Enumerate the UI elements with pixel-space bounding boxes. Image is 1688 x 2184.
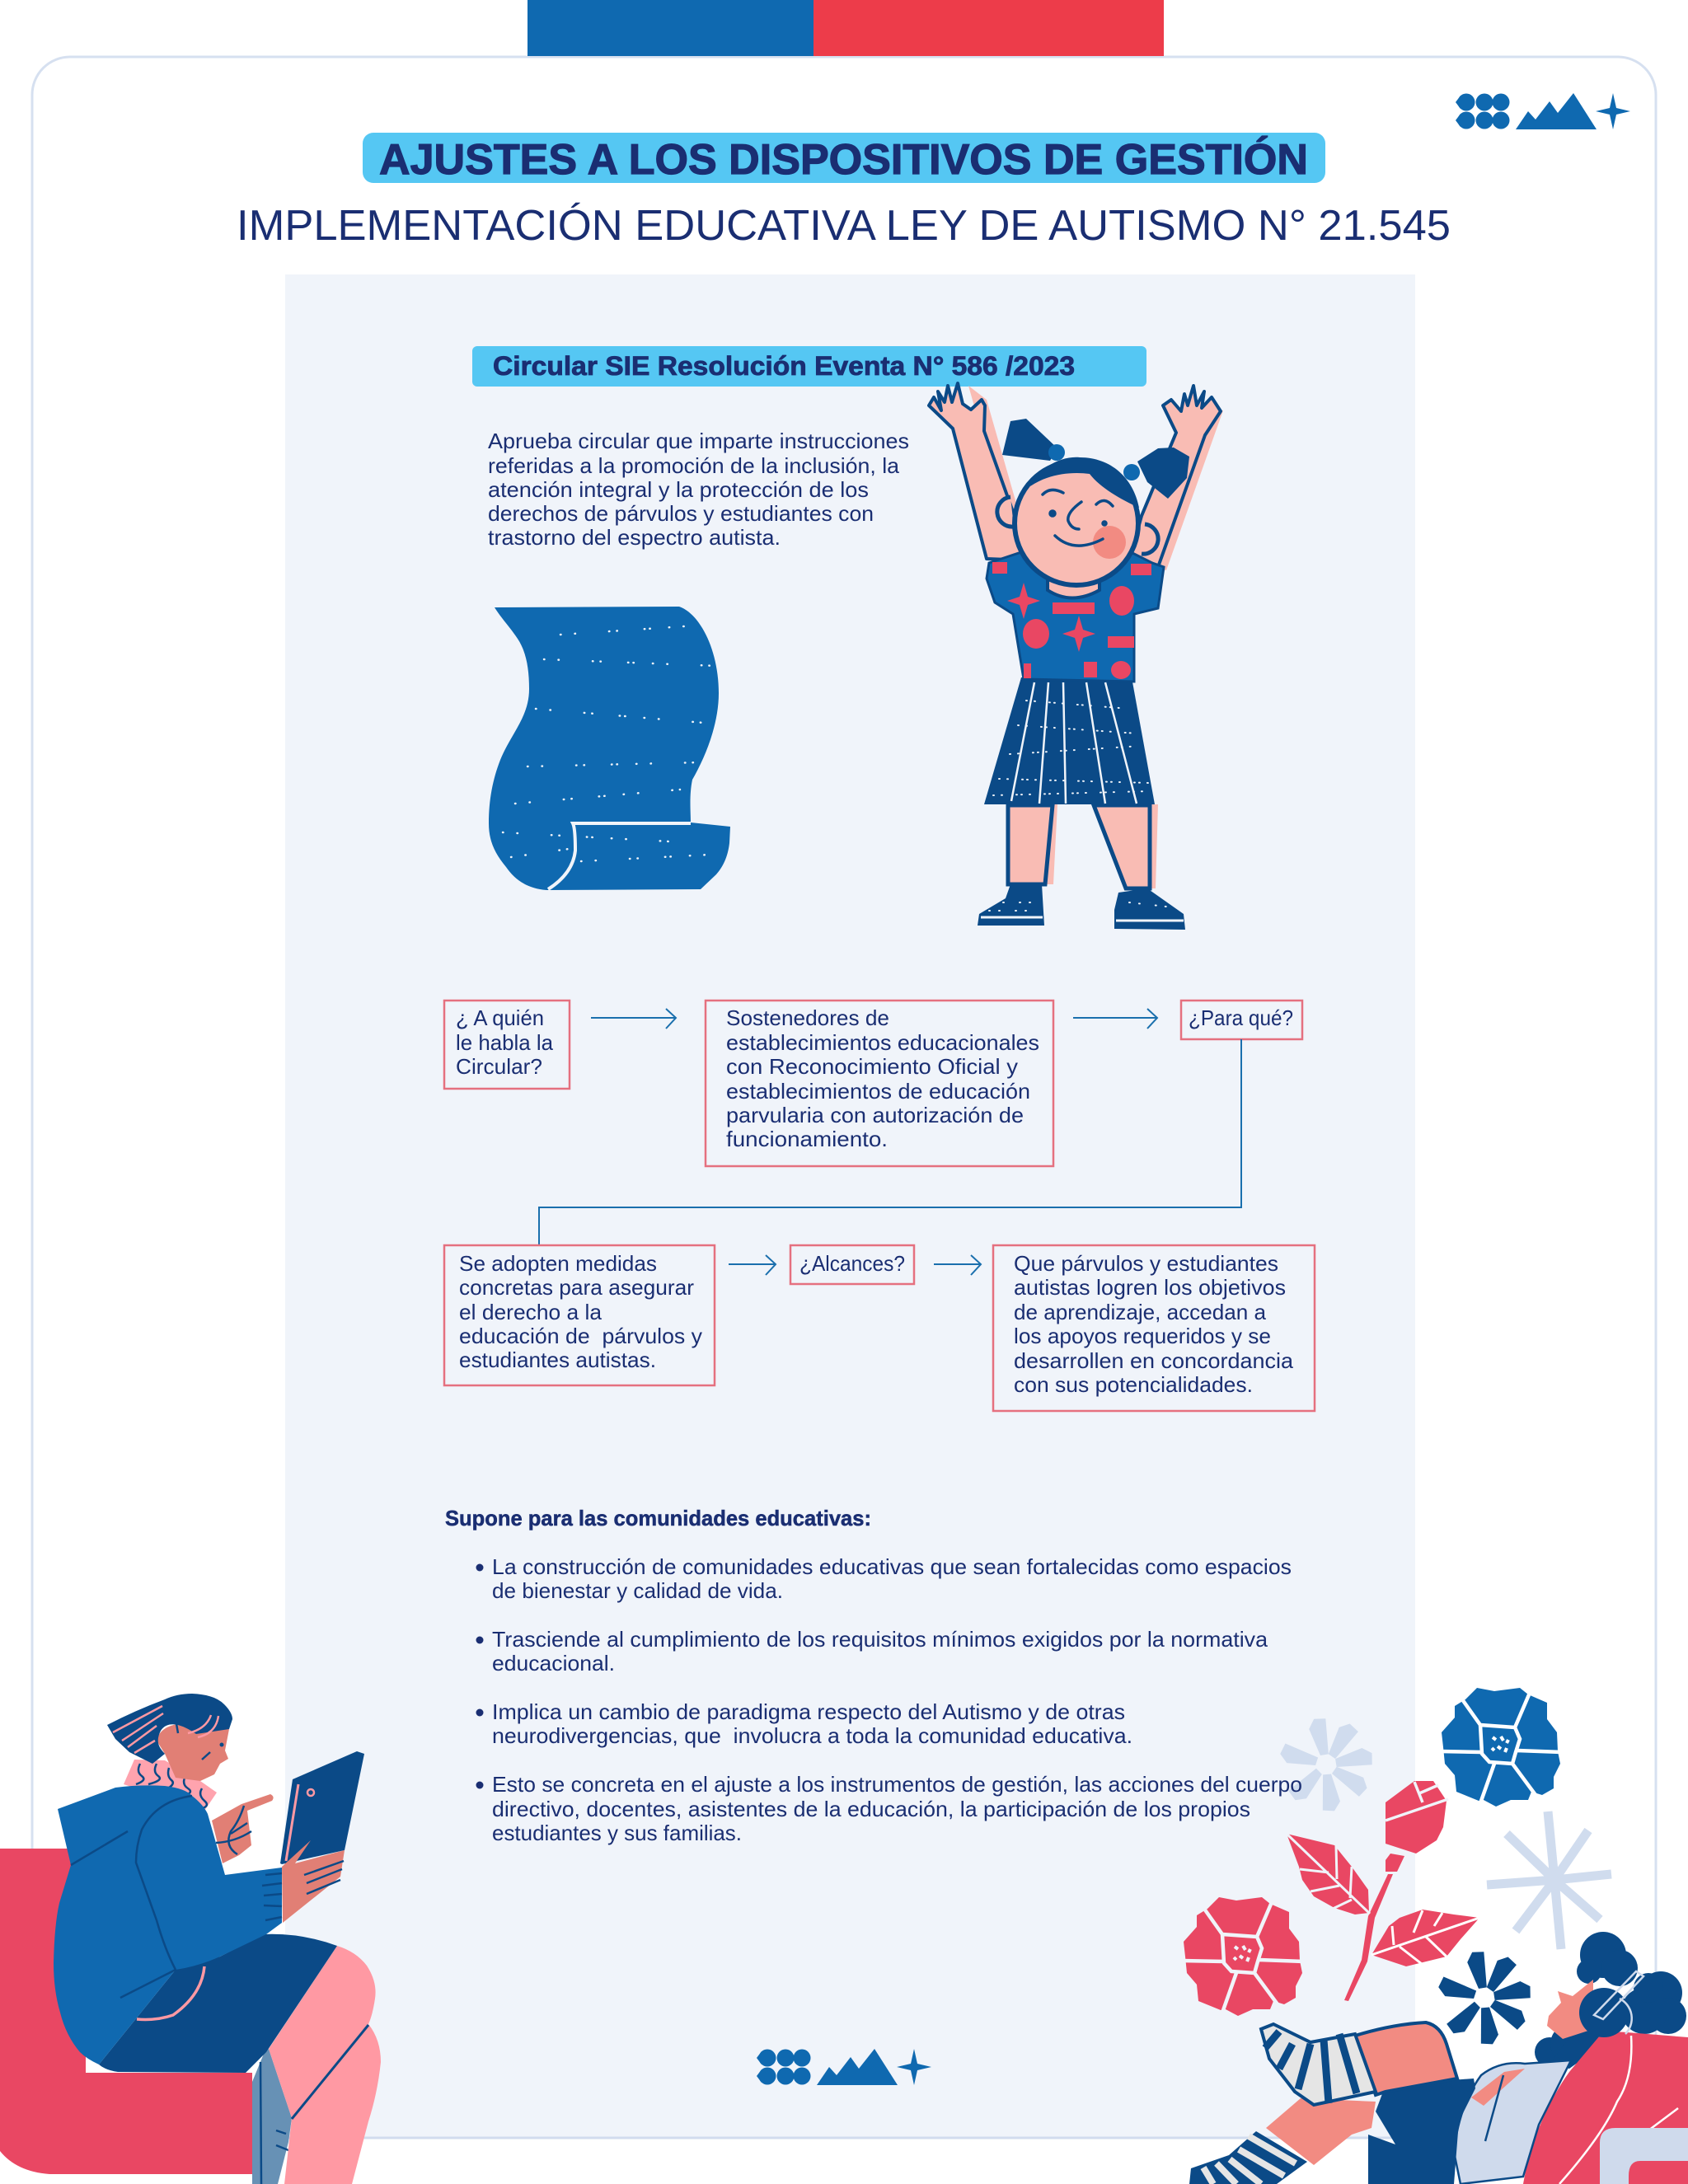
flow box: medidas: Se adopten medidas — [459, 1251, 657, 1276]
flow box: objetivos: autistas logren los objetivos — [1014, 1275, 1286, 1300]
girl: face — [1043, 490, 1113, 546]
flow box: objetivos: Que párvulos y estudiantes — [1014, 1251, 1278, 1276]
headphones — [1579, 1971, 1643, 2037]
flow box: medidas — [444, 1245, 715, 1385]
icon: document scroll — [489, 607, 730, 890]
girl: hair — [1030, 457, 1139, 508]
lower sock — [1189, 2131, 1307, 2184]
flow box: sostenedores: establecimientos educacionales — [726, 1030, 1039, 1055]
flow box: medidas: estudiantes autistas. — [459, 1347, 656, 1372]
right leaf — [1372, 1910, 1479, 1966]
flow box: objetivos: desarrollen en concordancia — [1014, 1348, 1294, 1373]
flow box: para qué — [1181, 1001, 1302, 1039]
girl: skirt — [984, 677, 1155, 804]
chair pale block — [1600, 2128, 1688, 2184]
intro paragraph: atención integral y la protección de los — [488, 477, 869, 502]
flow box: sostenedores: con Reconocimiento Oficial y — [726, 1054, 1018, 1079]
flow box: medidas: educación de párvulos y — [459, 1324, 702, 1348]
armchair — [0, 1849, 252, 2174]
intro paragraph: derechos de párvulos y estudiantes con — [488, 501, 874, 526]
left leaf — [1287, 1834, 1370, 1915]
section heading: Supone para las comunidades educativas: — [445, 1506, 871, 1530]
girl: legs — [1008, 805, 1150, 888]
pink legs — [269, 1946, 381, 2184]
flow box: alcances — [790, 1245, 914, 1284]
decoration: red rose with leaves — [1287, 1781, 1479, 2001]
flow box: para qué: ¿Para qué? — [1189, 1005, 1293, 1030]
girl: cheek — [1093, 526, 1126, 559]
red reclining chair — [1523, 2032, 1688, 2184]
flow box: sostenedores: funcionamiento. — [726, 1127, 888, 1151]
logo: bottom center — [757, 2049, 931, 2085]
bullet list — [476, 1554, 1302, 1845]
scarf — [124, 1760, 217, 1811]
upper striped sock — [1261, 2024, 1376, 2105]
arrow — [1073, 1009, 1157, 1029]
connector arrow line — [539, 1039, 1241, 1245]
flow box: objetivos: de aprendizaje, accedan a — [1014, 1300, 1267, 1324]
bullet list: directivo, docentes, asistentes de la educación, la participación de los propios — [492, 1797, 1250, 1821]
girl: pigtails — [1002, 419, 1189, 499]
bullet list: La construcción de comunidades educativas que sean fortalecidas como espacios — [492, 1554, 1292, 1579]
flow box: sostenedores: parvularia con autorización de — [726, 1103, 1024, 1127]
circular heading — [472, 346, 1146, 387]
bullet list: de bienestar y calidad de vida. — [492, 1578, 783, 1603]
hand on tablet — [282, 1840, 345, 1923]
intro paragraph — [488, 429, 909, 550]
pale sweater — [1454, 2060, 1571, 2184]
flow box: medidas: concretas para asegurar — [459, 1275, 694, 1300]
illustration: woman reading tablet on armchair — [0, 1694, 381, 2184]
arrow — [729, 1255, 776, 1275]
bullet list: Esto se concreta en el ajuste a los instrumentos de gestión, las acciones del cuerpo — [492, 1772, 1302, 1797]
girl: shirt with pattern — [987, 551, 1164, 682]
decoration: pale asterisk flower — [1278, 1717, 1374, 1812]
girl: pink offset shadow — [968, 386, 1223, 888]
decoration: dark asterisk flower — [1437, 1950, 1532, 2046]
flow box: a quién: ¿ A quién — [456, 1005, 544, 1030]
bullet list: Trasciende al cumplimiento de los requisitos mínimos exigidos por la normativa — [492, 1627, 1268, 1652]
bullet list: educacional. — [492, 1651, 615, 1675]
decoration: red flower — [1182, 1897, 1304, 2016]
face — [1547, 1980, 1593, 2039]
decoration: pale starburst — [1487, 1811, 1611, 1949]
arrow — [934, 1255, 981, 1275]
girl: shoes — [978, 884, 1185, 930]
lower leg — [1266, 2098, 1376, 2165]
face — [157, 1714, 229, 1781]
flow box: a quién: le habla la — [456, 1030, 554, 1055]
hair curls — [1535, 1932, 1686, 2069]
arrow — [591, 1009, 676, 1029]
flow box: alcances: ¿Alcances? — [799, 1251, 905, 1276]
flow box: objetivos: con sus potencialidades. — [1014, 1372, 1253, 1397]
flow box: a quién: Circular? — [456, 1054, 542, 1079]
girl: head — [1015, 462, 1138, 585]
rose bud — [1386, 1781, 1448, 1854]
hoodie — [54, 1785, 282, 2064]
grey-blue calf — [252, 2049, 292, 2184]
flow box: sostenedores — [706, 1001, 1053, 1166]
flow box: sostenedores: establecimientos de educación — [726, 1079, 1030, 1104]
top flag bar — [528, 0, 1164, 56]
intro paragraph: Aprueba circular que imparte instrucciones — [488, 429, 909, 453]
logo: top right — [1456, 93, 1630, 129]
bullet list: neurodivergencias, que involucra a toda la comunidad educativa. — [492, 1723, 1132, 1748]
subtitle: IMPLEMENTACIÓN EDUCATIVA LEY DE AUTISMO N° 21.545 — [237, 202, 1451, 250]
dark skirt — [99, 1934, 337, 2073]
flow box: sostenedores: Sostenedores de — [726, 1005, 889, 1030]
circular heading: Circular SIE Resolución Eventa N° 586 /2023 — [493, 351, 1075, 381]
flow box: objetivos — [993, 1245, 1315, 1411]
dark skirt — [1368, 2079, 1475, 2184]
girl: arms and hands — [929, 383, 1221, 567]
pointing hand — [212, 1794, 274, 1863]
flow box: a quién — [444, 1001, 570, 1089]
illustration: woman reclining with headphones — [1189, 1932, 1688, 2184]
girl: neck — [1048, 569, 1100, 598]
upper leg — [1355, 2022, 1457, 2095]
bullet list: estudiantes y sus familias. — [492, 1821, 742, 1845]
illustration: girl with raised arms — [929, 383, 1223, 930]
hair — [107, 1694, 232, 1764]
content panel — [285, 274, 1415, 2138]
stem — [1344, 1854, 1404, 2001]
bullet list: Implica un cambio de paradigma respecto del Autismo y de otras — [492, 1699, 1125, 1724]
flow box: objetivos: los apoyos requeridos y se — [1014, 1324, 1271, 1348]
intro paragraph: trastorno del espectro autista. — [488, 525, 781, 550]
flow box: medidas: el derecho a la — [459, 1300, 603, 1324]
tablet — [280, 1751, 364, 1864]
title: AJUSTES A LOS DISPOSITIVOS DE GESTIÓN — [379, 136, 1308, 184]
girl: ears — [997, 497, 1158, 554]
intro paragraph: referidas a la promoción de la inclusión, la — [488, 453, 900, 478]
decoration: blue flower — [1440, 1688, 1562, 1807]
